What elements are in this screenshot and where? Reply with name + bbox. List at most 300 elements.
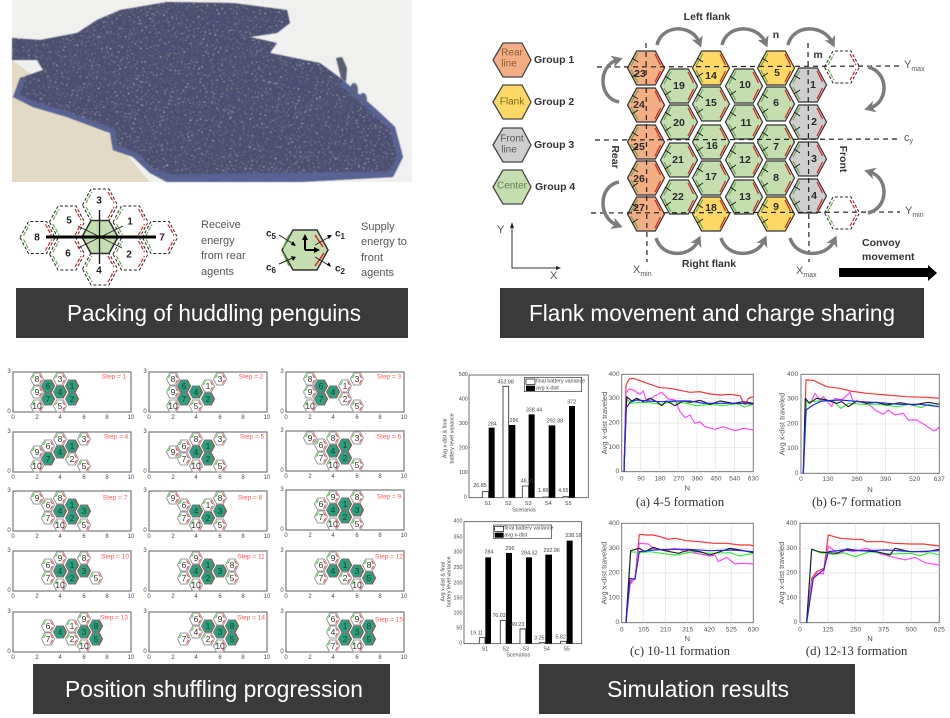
step 11 [143,548,271,600]
hexagon convoy formation: 23 [634,68,646,80]
step 7: 10 [55,520,65,530]
step 5: 8 [194,434,199,444]
bar chart: top: 372 [567,400,576,406]
bar chart: bottom: battery level variance [446,556,452,607]
step 15: 8 [367,621,372,631]
step 2: 1 [206,381,211,391]
hexagon packing diagram: 8 [34,232,40,244]
step 8: 10 [191,520,201,530]
step 12: 4 [331,566,336,576]
step 13: 6 [46,621,51,631]
hexagon convoy formation: 10 [739,79,751,91]
step 4: 2 [70,454,75,464]
line chart: 6-7 formation [777,371,945,509]
step 2: 5 [194,401,199,411]
step 7: 5 [82,520,87,530]
step 11: 4 [194,566,199,576]
bar chart: bottom: 76.03 [492,613,506,619]
step 12: 6 [319,560,324,570]
step 10: 4 [58,566,63,576]
legend: groups: Rear [501,48,524,58]
step 3: 2 [343,394,348,404]
hexagon packing diagram: 6 [65,248,71,260]
step 9: 5 [355,519,360,529]
agent charge-sharing hexagon icon: c [335,264,341,274]
bar chart: top: 296 [510,418,518,424]
hexagon convoy formation: 8 [773,172,779,184]
formation labels: max [803,272,817,278]
step 13: 10 [79,641,89,651]
bar chart: top: 4.55 [558,488,569,494]
step 15 [280,609,408,661]
step 10: 2 [70,573,75,583]
step 15: 10 [352,641,362,651]
step 5 [143,429,271,481]
bar chart: top: S2 [505,501,512,507]
bar chart: bottom: S3 [522,646,529,652]
formation labels: X [633,264,640,276]
bar chart: top: 46.91 [521,479,534,485]
bar chart: bottom: 3.25 [534,635,545,641]
line chart: 12-13 formation: 0 [794,619,798,626]
line chart: 10-11 formation: 315 [682,626,694,633]
step 10: 3 [82,566,87,576]
step 1: 9 [35,387,40,397]
step 11: 9 [194,553,199,563]
line chart: 6-7 formation: 300 [787,395,798,402]
bar chart: bottom: 350 [454,534,462,540]
bar chart: top: S1 [484,501,491,507]
step 13: 4 [58,627,63,637]
step 6: 3 [355,433,360,443]
step 14: 9 [218,614,223,624]
step 9: 4 [331,505,336,515]
supply energy text: energy to [361,236,407,248]
legend: groups [493,43,575,204]
agent charge-sharing hexagon icon: 5 [272,232,277,240]
formation labels: Left flank [684,11,730,23]
bar chart: bottom: 300 [454,550,462,556]
line chart: 4-5 formation: 100 [608,444,620,451]
step 2: 10 [168,401,178,411]
step 6: 6 [319,440,324,450]
step 8 [143,488,271,540]
step 9: 7 [319,512,324,522]
hexagon convoy formation: 13 [739,191,751,203]
bar chart: bottom: 200 [454,580,462,586]
line chart: 12-13 formation: 300 [786,545,797,552]
formation labels: min [912,212,924,218]
caption bar: position shuffling: Position shuffling progression [65,676,363,702]
step 11: 2 [206,573,211,583]
line chart: 6-7 formation: 0 [795,470,799,477]
line chart: 12-13 formation: 400 [786,520,797,527]
hexagon convoy formation: 15 [705,97,717,109]
step 5: 3 [218,434,223,444]
bar chart: bottom: 250 [454,565,462,571]
receive energy text: agents [201,266,235,278]
legend: groups: Group 2 [534,96,574,108]
step 5: 1 [206,441,211,451]
step 3 [280,369,408,421]
step 7: 6 [46,500,51,510]
step 12: 7 [319,573,324,583]
step 12: 2 [343,573,348,583]
XY axes [497,222,561,282]
step 10: 9 [58,553,63,563]
step 12: 10 [352,580,362,590]
step 13 [7,609,135,661]
line chart: 4-5 formation: 400 [608,371,620,378]
step 6: 4 [331,446,336,456]
line chart: 4-5 formation: 300 [608,395,620,402]
bar chart: bottom: S4 [543,646,550,652]
step 8: 6 [182,500,187,510]
step 3: 4 [331,387,336,397]
agent charge-sharing hexagon icon: c [335,228,341,240]
step 11: 3 [218,566,223,576]
step 10: 10 [55,580,65,590]
step 1: 4 [58,387,63,397]
step 3: 5 [355,401,360,411]
step 10: 1 [70,560,75,570]
step 8: Step = 8 [238,494,263,502]
step 1: 3 [58,374,63,384]
step 3: 9 [308,387,313,397]
hexagon convoy formation: 20 [673,117,685,129]
step 13: 1 [70,621,75,631]
step 12: 3 [355,566,360,576]
step 14: 3 [218,627,223,637]
step 14: 6 [194,614,199,624]
convoy movement arrow: movement [862,251,915,263]
step 9: 8 [355,492,360,502]
step 9: 9 [331,492,336,502]
step 5: 6 [182,441,187,451]
hexagon convoy formation: 7 [773,141,779,153]
step 10: 7 [46,573,51,583]
step 8: 1 [206,500,211,510]
line chart: 6-7 formation: N [867,485,873,494]
step 15: 6 [331,614,336,624]
hexagon convoy formation: 12 [739,154,751,166]
line chart: 12-13 formation: 100 [786,594,797,601]
line chart: 12-13 formation: (d) 12-13 formation [806,644,907,658]
penguin huddle photo [12,0,412,182]
formation labels: max [911,66,925,72]
step 6: 10 [328,460,338,470]
step 7 [7,488,135,540]
step 12: 8 [367,560,372,570]
step 10: 8 [82,553,87,563]
step 12: 1 [343,560,348,570]
step 14: Step = 14 [237,614,265,622]
step 8: 5 [218,520,223,530]
step 14: 8 [230,621,235,631]
caption bar: packing [16,288,408,338]
step 8: 2 [206,513,211,523]
step 4: 4 [58,447,63,457]
line chart: 12-13 formation: 125 [822,626,834,633]
step 7: 8 [58,493,63,503]
curved flank movement arrows [603,29,884,253]
step 1: 1 [70,381,75,391]
line chart: 12-13 formation: 625 [934,626,945,633]
bar chart: bottom: 292.96 [544,548,560,554]
step 2: 8 [171,374,176,384]
convoy movement arrow: Convoy [862,237,901,249]
step 3: 7 [319,394,324,404]
line chart: 6-7 formation: 520 [909,476,920,483]
step 4: 9 [35,447,40,457]
step 2 [143,369,271,421]
step 2: 2 [206,394,211,404]
bar chart: bottom: 150 [454,595,462,601]
step 6: 2 [343,453,348,463]
formation labels: n [773,29,779,41]
line chart: 10-11 formation: 105 [638,626,650,633]
agent charge-sharing hexagon icon: c [266,262,272,274]
bar chart: bottom: S1 [482,646,488,652]
step 13: 2 [70,634,75,644]
step 14: 2 [206,634,211,644]
step 1: 7 [46,394,51,404]
step 1: 2 [70,394,75,404]
step 13: Step = 13 [100,614,128,622]
step 1: 6 [46,381,51,391]
step 13: 3 [82,627,87,637]
formation labels: m [813,49,823,61]
bar chart: top: 400 [459,396,468,402]
panel: position shuffling steps [7,369,408,661]
step 7: 3 [82,506,87,516]
bar chart: bottom: 50 [456,626,462,632]
step 9: 2 [343,512,348,522]
line chart: 6-7 formation: 130 [822,476,834,483]
line chart: 12-13 formation [777,520,945,658]
hexagon convoy formation: 24 [633,99,645,111]
line chart: 12-13 formation: N [867,634,873,643]
step 4: 1 [70,441,75,451]
step 13: 7 [46,634,51,644]
legend: groups: Center [497,180,528,192]
receive energy text: Receive [201,219,241,231]
line chart: 12-13 formation: Avg x-dist traveled [777,542,786,604]
step 3: 10 [305,401,315,411]
step 7: 4 [58,506,63,516]
legend: groups: Group 1 [534,54,574,66]
step 5: 10 [191,461,201,471]
bar chart: bottom: 0 [459,641,462,647]
hexagon convoy formation: 27 [633,202,645,214]
hexagon convoy formation [591,43,900,262]
hexagon convoy formation: 3 [811,153,817,165]
step 6 [280,428,408,480]
step 9: Step = 9 [377,494,402,500]
hexagon packing diagram: 2 [126,250,132,260]
step 6: 8 [331,433,336,443]
bar chart: bottom: 296 [506,546,514,552]
legend: groups: line [501,144,517,156]
line chart: 4-5 formation: 630 [748,475,759,482]
step 7: 1 [70,500,75,510]
line chart: 6-7 formation: 260 [851,476,863,483]
step 4: Step = 4 [104,434,129,440]
step 4: 7 [46,454,51,464]
step 4: 10 [32,461,42,471]
legend: groups: Group 4 [535,181,575,193]
bar chart: bottom: S5 [563,646,570,652]
agent charge-sharing hexagon icon: c [266,228,272,240]
step 14 [143,609,271,661]
formation labels: Rear [609,145,621,169]
step 5: Step = 5 [240,434,265,440]
receive energy text [201,219,246,278]
step 13: 9 [82,614,87,624]
line chart: 4-5 formation: N [685,483,690,492]
line chart: 12-13 formation: 250 [850,626,861,633]
legend: groups: Group 3 [534,139,574,151]
hexagon convoy formation: 17 [705,171,717,183]
bar chart: top: 0 [464,495,467,501]
step 3: 1 [343,381,348,391]
step 6: 1 [343,440,348,450]
bar chart: top: S4 [545,501,552,507]
step 4: 8 [58,434,63,444]
line chart: 4-5 formation: 200 [608,419,620,426]
step 13: 8 [94,621,99,631]
bar chart: top: 100 [459,470,468,476]
agent charge-sharing hexagon icon: 2 [341,266,346,276]
hexagon convoy formation: 25 [633,141,645,153]
step 7: 9 [35,493,40,503]
step 4: 5 [82,461,87,471]
bar chart: top: battery level variance [450,413,456,464]
bar chart: top: final battery variance [536,379,585,385]
bar chart: bottom: 100 [454,611,462,617]
line chart: 12-13 formation: 375 [878,626,889,633]
hexagon convoy formation: 2 [811,116,817,128]
step 2: 7 [182,394,187,404]
bar chart: top: 500 [459,372,468,378]
hexagon packing diagram: 4 [96,266,102,276]
step 12: Step = 12 [375,554,403,560]
step 9: 6 [319,499,324,509]
step 13: 5 [94,634,99,644]
line chart: 6-7 formation: 100 [787,445,798,452]
supply energy text: Supply [361,221,395,233]
XY axes: X [550,270,558,282]
step 11: 6 [182,560,187,570]
step 15: 3 [355,627,360,637]
step 2: 9 [171,387,176,397]
step 15: 7 [331,641,336,651]
bar chart: bottom: Scenarios [506,653,531,659]
bar chart: bottom: 49.23 [511,622,524,628]
line chart: 4-5 formation: 180 [654,475,666,482]
formation labels: Y [904,59,911,71]
legend: groups: Front [500,134,524,144]
formation labels: c [904,132,910,144]
step 11: 10 [191,580,201,590]
step 12: 5 [367,573,372,583]
bar chart: top: 1.86 [538,488,549,494]
step 15: 5 [367,634,372,644]
bar chart: bottom: 19.11 [470,631,483,637]
line chart: 10-11 formation: 525 [726,626,737,633]
line chart: 4-5 formation: 270 [673,475,685,482]
step 1 [7,369,135,421]
step 6: Step = 6 [377,434,402,440]
line chart: 6-7 formation: 390 [880,476,891,483]
line chart: 12-13 formation: 500 [906,626,917,633]
bar chart: bottom: 5.82 [555,634,566,640]
step 15: 1 [343,621,348,631]
formation labels: Y [905,205,912,217]
step 5: 4 [194,447,199,457]
receive energy text: from rear [201,250,246,262]
step 2: 6 [182,381,187,391]
agent charge-sharing hexagon icon: 1 [341,232,346,240]
step 1: 10 [32,401,42,411]
line chart: 10-11 formation: 420 [704,626,715,633]
line chart: 6-7 formation: 637 [934,476,945,483]
caption bar: simulation results: Simulation results [607,676,789,702]
hexagon convoy formation: 11 [740,117,752,129]
bar chart: top: 292.88 [547,419,563,425]
step 10: 6 [46,560,51,570]
bar chart: bottom: 284.32 [521,551,538,557]
bar chart: top: avg x-dist [536,385,559,391]
step 9: 1 [343,499,348,509]
step 3: 3 [355,374,360,384]
formation labels: X [796,265,803,277]
step 14: 7 [182,634,187,644]
step 3: 6 [319,381,324,391]
hexagon packing diagram: 1 [127,216,133,228]
step 15: Step = 15 [375,616,403,624]
caption bar: flank movement [500,288,924,338]
bar chart: bottom: avg x-dist [504,532,528,538]
line chart: 10-11 formation: 300 [608,545,620,552]
line chart: 10-11 formation: Avg x-dist traveled [599,542,608,604]
formation labels: y [910,138,914,144]
step 2: 4 [194,387,199,397]
step 2: Step = 2 [239,374,264,380]
step 15: 2 [343,634,348,644]
line chart: 4-5 formation: 0 [615,468,619,475]
line chart: 6-7 formation: 200 [787,420,798,427]
step 8: 7 [182,513,187,523]
line chart: 4-5 formation: (a) 4-5 formation [636,495,724,509]
formation labels: Front [837,146,849,173]
hexagon packing diagram: 7 [159,232,165,244]
formation labels: Right flank [682,258,736,270]
step 4: 3 [82,434,87,444]
bar chart: top [443,372,588,514]
step 5: 7 [182,454,187,464]
step 1: 5 [58,401,63,411]
step 7: 7 [46,513,51,523]
step 12: 9 [331,553,336,563]
step 1: Step = 1 [102,374,127,380]
step 6: 9 [308,433,313,443]
line chart: 10-11 formation: 0 [620,626,624,633]
line chart: 4-5 formation: 90 [637,475,645,482]
step 11: 7 [182,573,187,583]
bar chart: top: S5 [565,501,572,507]
step 8: 9 [171,493,176,503]
